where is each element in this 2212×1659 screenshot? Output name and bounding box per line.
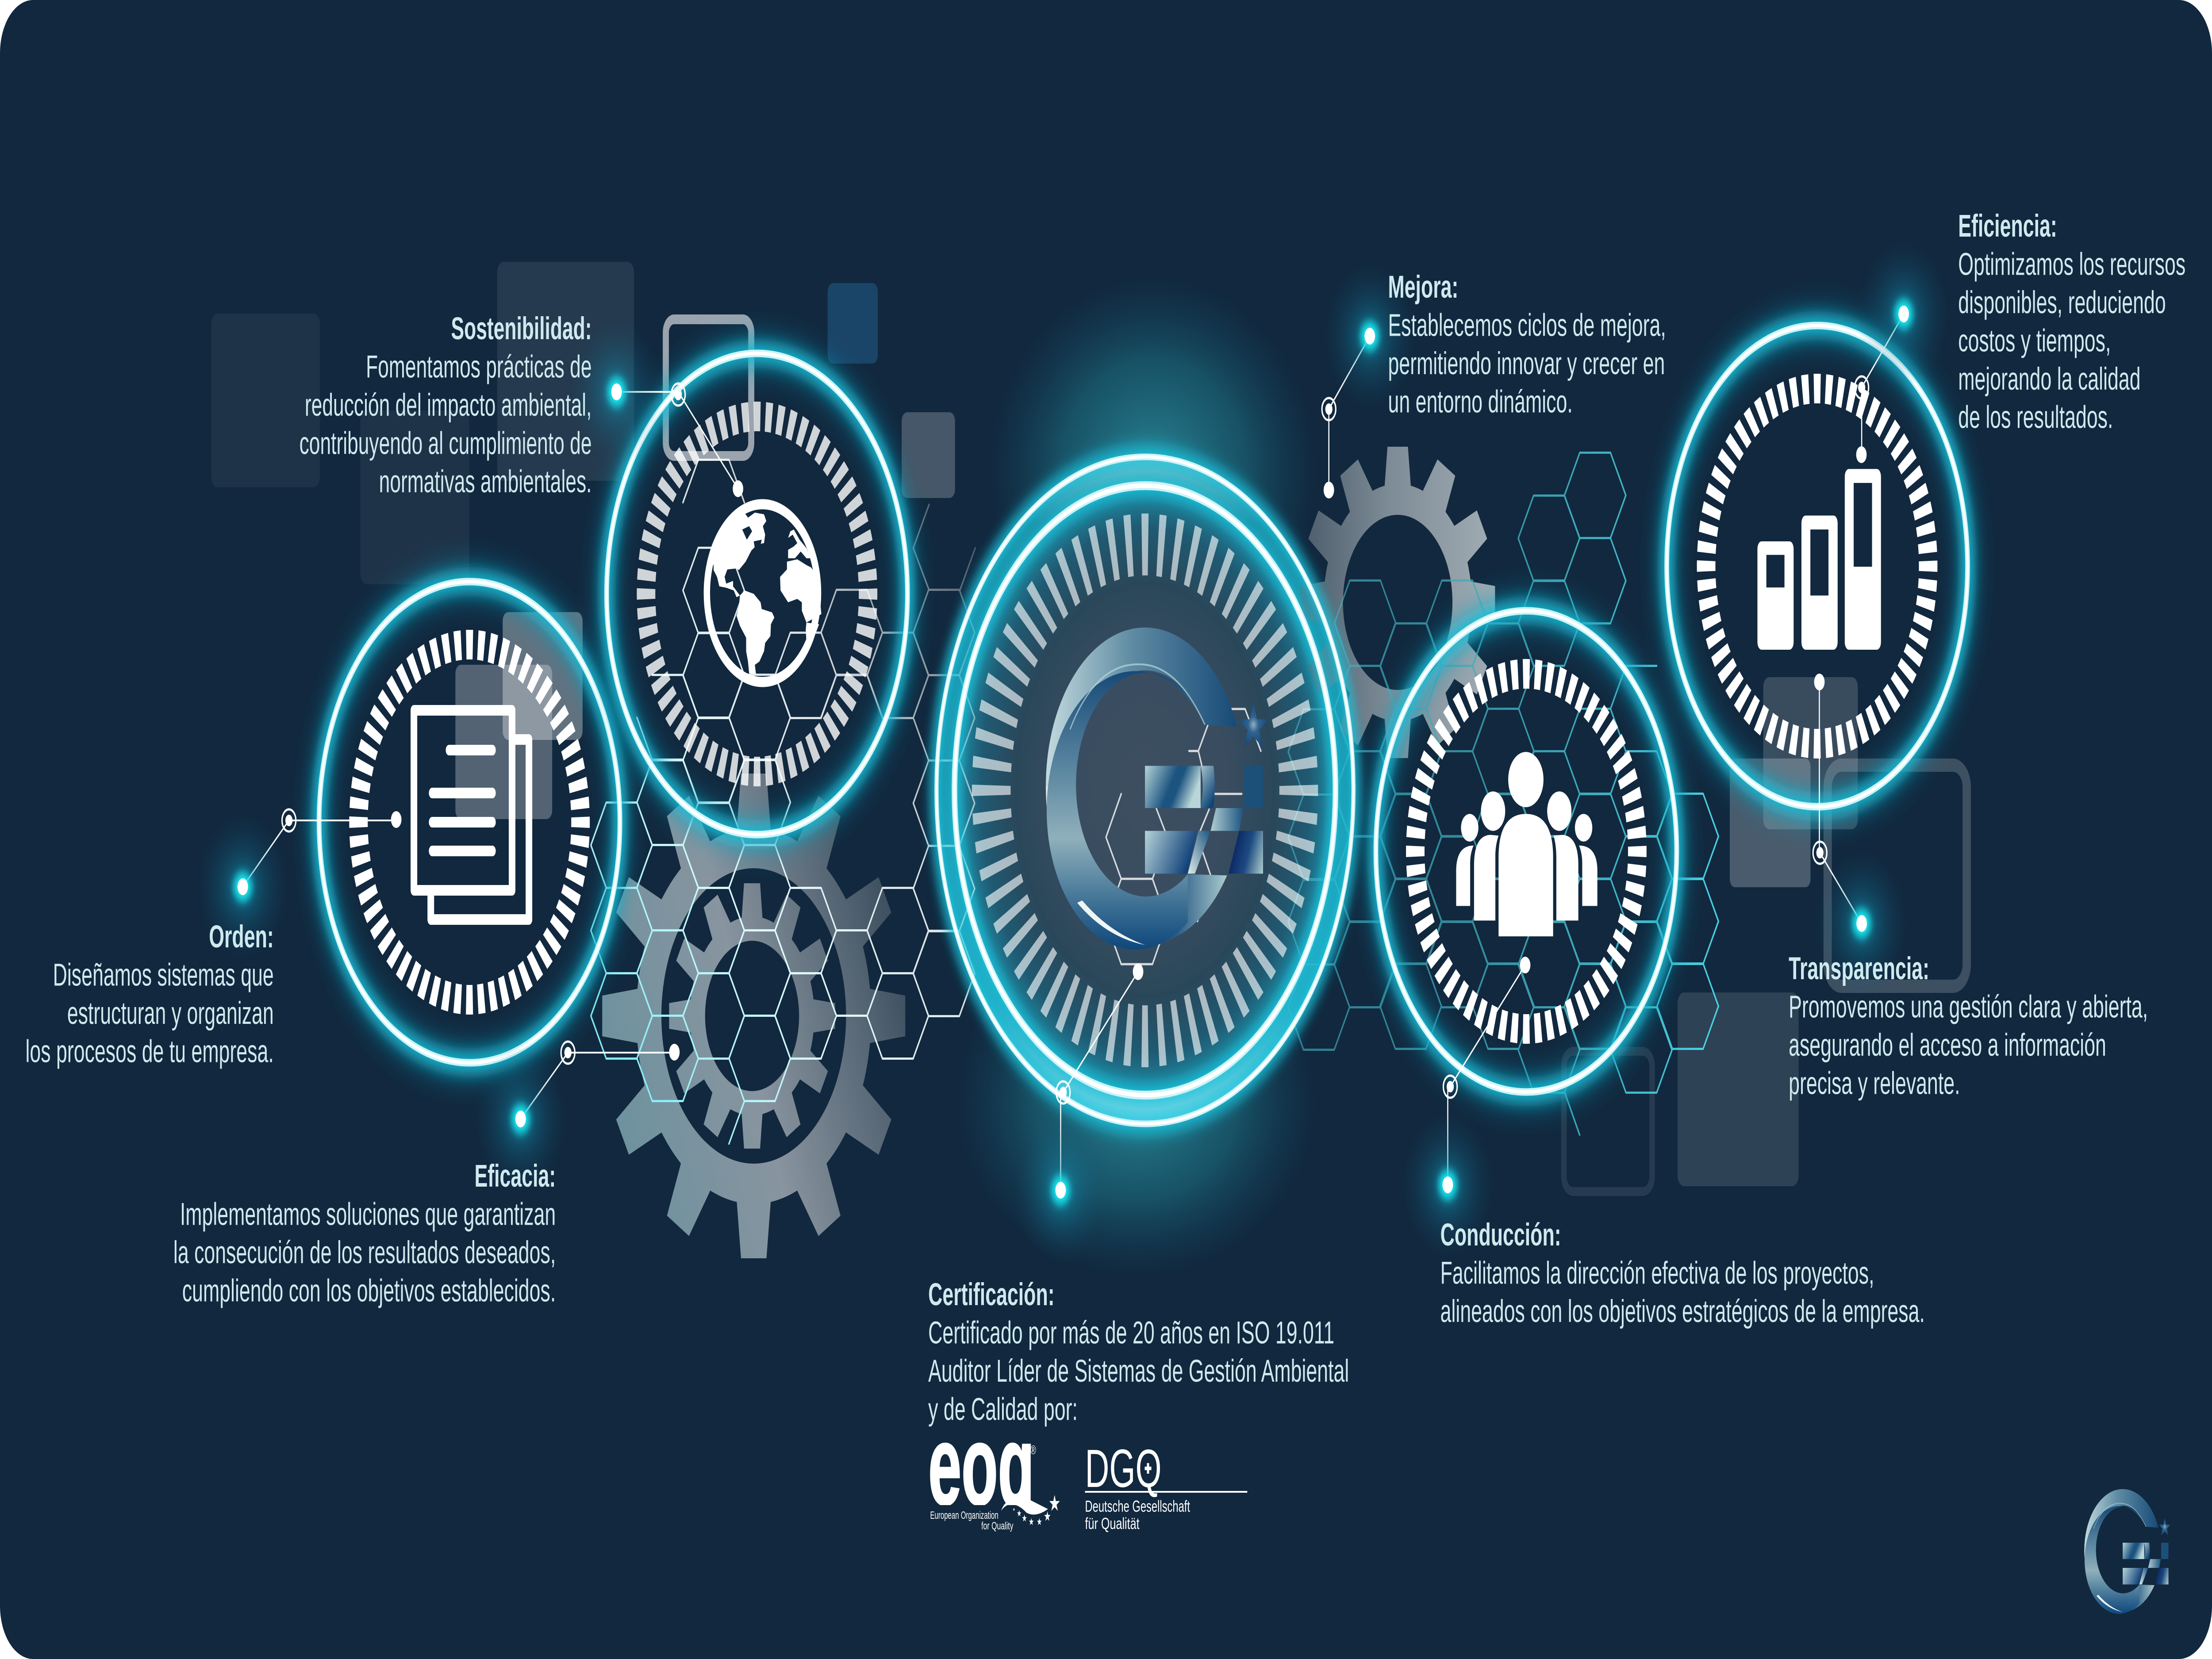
connector: transparencia	[1813, 674, 1909, 999]
text block: orden: Orden:	[209, 919, 274, 954]
text block: eficacia: la consecución de los resultados deseados,	[173, 1234, 556, 1270]
company logo, bottom right	[2084, 1489, 2170, 1614]
text block: transparencia: Promovemos una gestión clara y abierta,	[1789, 989, 2148, 1024]
logo: EOQ: for Quality	[981, 1521, 1014, 1532]
text block: eficiencia: disponibles, reduciendo	[1958, 284, 2166, 320]
glow above the central ring	[987, 274, 1319, 663]
text block: transparencia: precisa y relevante.	[1789, 1065, 1960, 1101]
logo: DGQ: für Qualität	[1085, 1515, 1140, 1533]
text block: certificacion: Certificado por más de 20 años en ISO 19.011	[928, 1315, 1334, 1350]
connector: mejora	[1322, 261, 1417, 498]
ring: conduccion	[1376, 611, 1677, 1092]
text block: eficacia: cumpliendo con los objetivos establecidos.	[182, 1273, 556, 1308]
text block: mejora: Establecemos ciclos de mejora,	[1388, 307, 1666, 343]
glow below the central ring	[954, 924, 1319, 1278]
text block: sostenibilidad: normativas ambientales.	[379, 464, 591, 499]
connector: eficacia	[474, 1042, 680, 1194]
text block: orden: estructuran y organizan	[67, 995, 274, 1031]
text block: certificacion: y de Calidad por:	[928, 1391, 1078, 1427]
connector: conduccion	[1401, 957, 1530, 1260]
left double gear	[602, 774, 905, 1258]
text block: orden: Diseñamos sistemas que	[53, 957, 274, 992]
logo: EOQ: ®	[1030, 1443, 1036, 1457]
text block: eficiencia: Eficiencia:	[1958, 208, 2057, 244]
logo: EOQ	[930, 1443, 1060, 1532]
logo: DGQ: DGQ	[1085, 1438, 1162, 1498]
ring: central certification	[937, 457, 1353, 1124]
text block: conduccion: alineados con los objetivos estratégicos de la empresa.	[1440, 1293, 1925, 1329]
text block: mejora: permitiendo innovar y crecer en	[1388, 345, 1665, 381]
connector: certificacion	[1014, 963, 1143, 1265]
left hexagon mesh	[591, 460, 975, 1144]
text block: transparencia: asegurando el acceso a información	[1789, 1027, 2106, 1063]
logo: EOQ: eoq	[928, 1403, 1034, 1529]
icon: rising bars	[1757, 469, 1881, 650]
text block: certificacion: Auditor Líder de Sistemas de Gestión Ambiental	[928, 1353, 1349, 1389]
text block: sostenibilidad: contribuyendo al cumplimiento de	[300, 425, 592, 461]
text block: certificacion: Certificación:	[928, 1276, 1055, 1312]
text block: eficiencia: mejorando la calidad	[1958, 361, 2141, 397]
ring: eficiencia	[1667, 326, 1968, 807]
logo: EOQ: European Organization	[930, 1510, 998, 1521]
text block: orden: los procesos de tu empresa.	[25, 1034, 274, 1069]
connector: eficiencia	[1855, 239, 1951, 463]
ring: orden	[319, 582, 620, 1063]
logo: DGQ: Deutsche Gesellschaft	[1085, 1498, 1190, 1515]
text block: transparencia: Transparencia:	[1789, 950, 1929, 986]
logo: DGQ	[1085, 1438, 1247, 1533]
central ring disc	[937, 457, 1353, 1124]
icon: globe	[707, 504, 822, 682]
text block: mejora: un entorno dinámico.	[1388, 384, 1573, 419]
connector: sostenibilidad	[570, 317, 743, 497]
icon: documents	[414, 710, 529, 920]
central company logo	[1046, 628, 1268, 950]
text block: eficiencia: Optimizamos los recursos	[1958, 246, 2185, 282]
text block: eficacia: Implementamos soluciones que garantizan	[180, 1196, 556, 1232]
text block: eficacia: Eficacia:	[474, 1158, 556, 1194]
text block: eficiencia: costos y tiempos,	[1958, 323, 2111, 358]
ring: sostenibilidad	[607, 353, 907, 835]
text block: sostenibilidad: Sostenibilidad:	[451, 310, 591, 346]
text block: conduccion: Conducción:	[1440, 1217, 1561, 1253]
right gear	[1301, 447, 1495, 758]
translucent decorative squares	[211, 262, 1967, 1192]
icon: group of people	[1456, 752, 1598, 936]
text block: sostenibilidad: reducción del impacto ambiental,	[305, 387, 591, 423]
text block: mejora: Mejora:	[1388, 269, 1458, 305]
text block: conduccion: Facilitamos la dirección efectiva de los proyectos,	[1440, 1255, 1874, 1291]
connector: orden	[196, 809, 402, 962]
hexagon mesh inside central ring	[1106, 709, 1261, 964]
text block: eficiencia: de los resultados.	[1958, 399, 2113, 435]
text block: sostenibilidad: Fomentamos prácticas de	[366, 349, 591, 384]
right hexagon mesh	[1288, 453, 1718, 1135]
